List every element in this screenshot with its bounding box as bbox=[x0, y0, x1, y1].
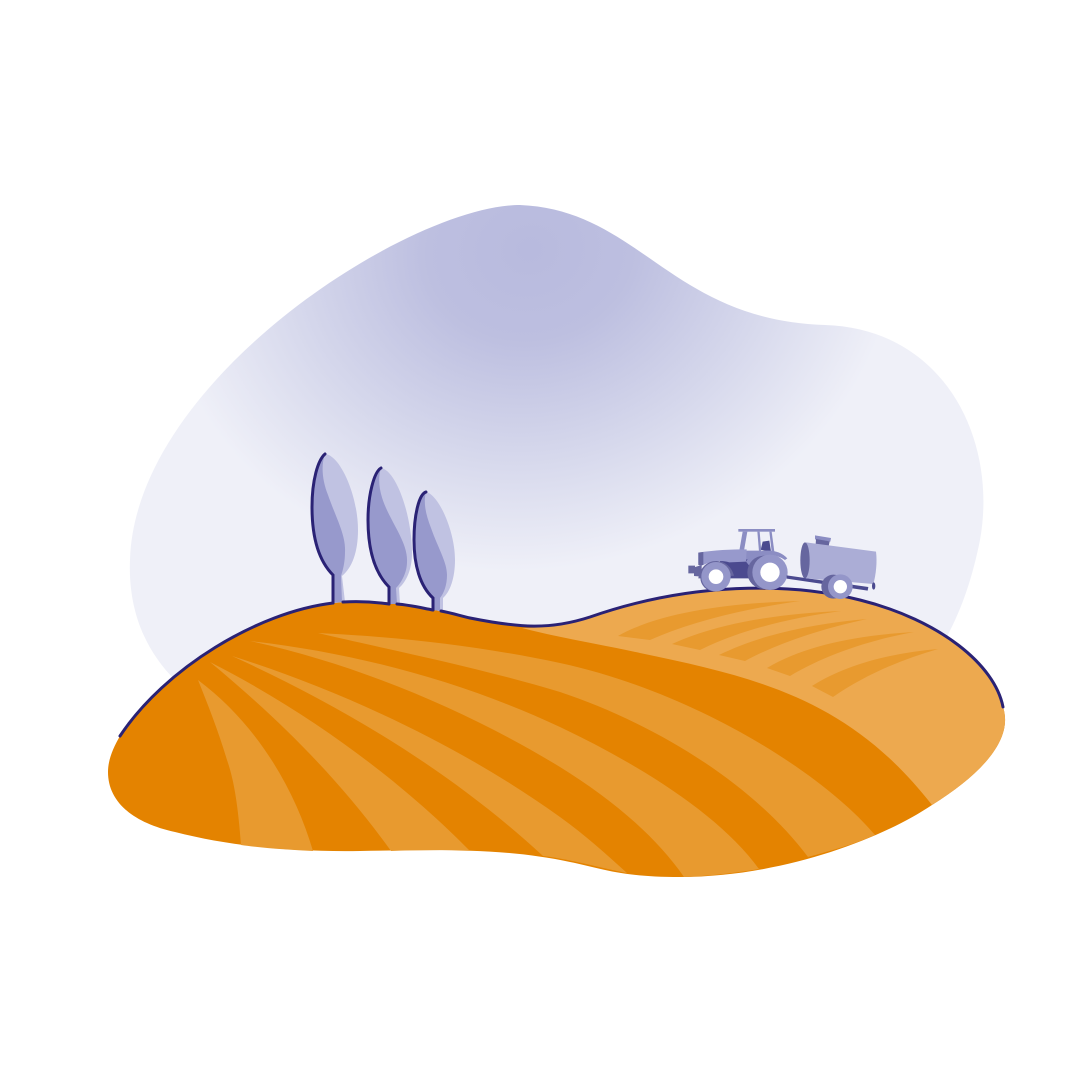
hill bbox=[108, 588, 1005, 877]
front fender bbox=[698, 561, 734, 578]
tail light bbox=[872, 582, 875, 590]
tank filler cap bbox=[815, 535, 831, 542]
background blob bbox=[130, 205, 983, 680]
tree 1 bbox=[312, 454, 358, 603]
tractor and tank trailer bbox=[688, 529, 877, 599]
furrow stripes bbox=[198, 601, 938, 877]
front grille bbox=[688, 552, 703, 577]
tractor cab bbox=[738, 529, 775, 562]
tree 3 bbox=[414, 492, 455, 611]
light field section bbox=[522, 588, 1005, 805]
tree 2 bbox=[368, 468, 412, 604]
front wheel bbox=[700, 562, 731, 591]
rear wheel bbox=[747, 555, 788, 590]
hill base bbox=[108, 588, 1005, 877]
tractor hood bbox=[698, 549, 747, 567]
tractor body bbox=[720, 557, 757, 578]
rear fender bbox=[746, 551, 787, 567]
tank end bbox=[800, 542, 810, 578]
trailer wheel bbox=[821, 574, 853, 599]
hill outline bbox=[120, 588, 1003, 736]
tow bar bbox=[787, 575, 868, 591]
tank bbox=[806, 542, 877, 584]
